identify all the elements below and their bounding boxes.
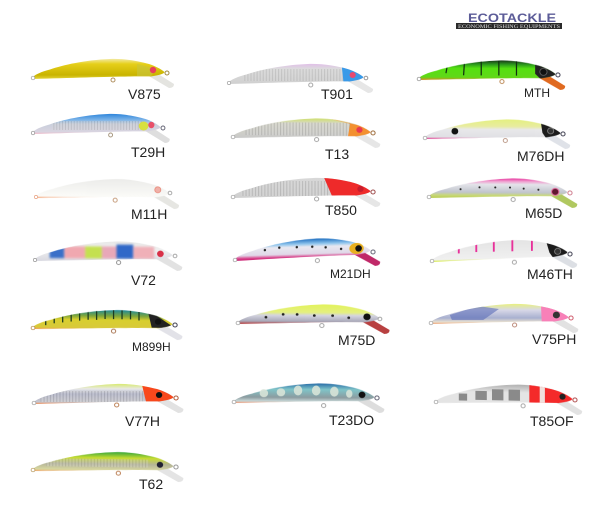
lure M76DH — [423, 118, 570, 149]
label V72: V72 — [131, 272, 156, 288]
lure T13 — [231, 115, 380, 148]
lure M46TH — [430, 240, 578, 268]
label M21DH: M21DH — [330, 267, 371, 281]
label V77H: V77H — [125, 413, 160, 429]
logo tagline: ECONOMIC FISHING EQUIPMENTS — [458, 24, 560, 30]
lure T29H — [31, 114, 170, 143]
lure T901 — [227, 63, 373, 93]
lure M75D — [236, 304, 390, 334]
label T850: T850 — [325, 202, 357, 218]
logo tagline bar — [456, 23, 562, 29]
label T85OF: T85OF — [530, 413, 574, 429]
label T29H: T29H — [131, 144, 165, 160]
lure T62 — [31, 451, 183, 482]
label T23DO: T23DO — [329, 412, 374, 428]
label M46TH: M46TH — [527, 266, 573, 282]
lure M21DH — [233, 237, 380, 270]
lure T23DO — [232, 383, 384, 413]
label T62: T62 — [139, 476, 163, 492]
lure M899H — [31, 308, 182, 340]
label M899H: M899H — [132, 340, 171, 354]
lure V72 — [33, 241, 182, 271]
label T13: T13 — [325, 146, 349, 162]
lure V77H — [32, 381, 183, 413]
label V875: V875 — [128, 86, 161, 102]
logo — [456, 11, 562, 30]
label M65D: M65D — [525, 205, 562, 221]
lure V75PH — [428, 304, 578, 333]
logo wordmark: ECOTACKLE — [468, 11, 556, 25]
label T901: T901 — [321, 86, 353, 102]
lure T85OF — [434, 384, 582, 415]
lure M11H — [34, 178, 179, 209]
label M76DH: M76DH — [517, 148, 564, 164]
lure MTH — [417, 57, 565, 90]
label M11H: M11H — [131, 206, 167, 222]
label M75D: M75D — [338, 332, 375, 348]
lure T850 — [231, 175, 380, 207]
lure V875 — [31, 59, 174, 88]
label MTH: MTH — [524, 86, 550, 100]
label V75PH: V75PH — [532, 331, 576, 347]
lure M65D — [427, 178, 577, 208]
